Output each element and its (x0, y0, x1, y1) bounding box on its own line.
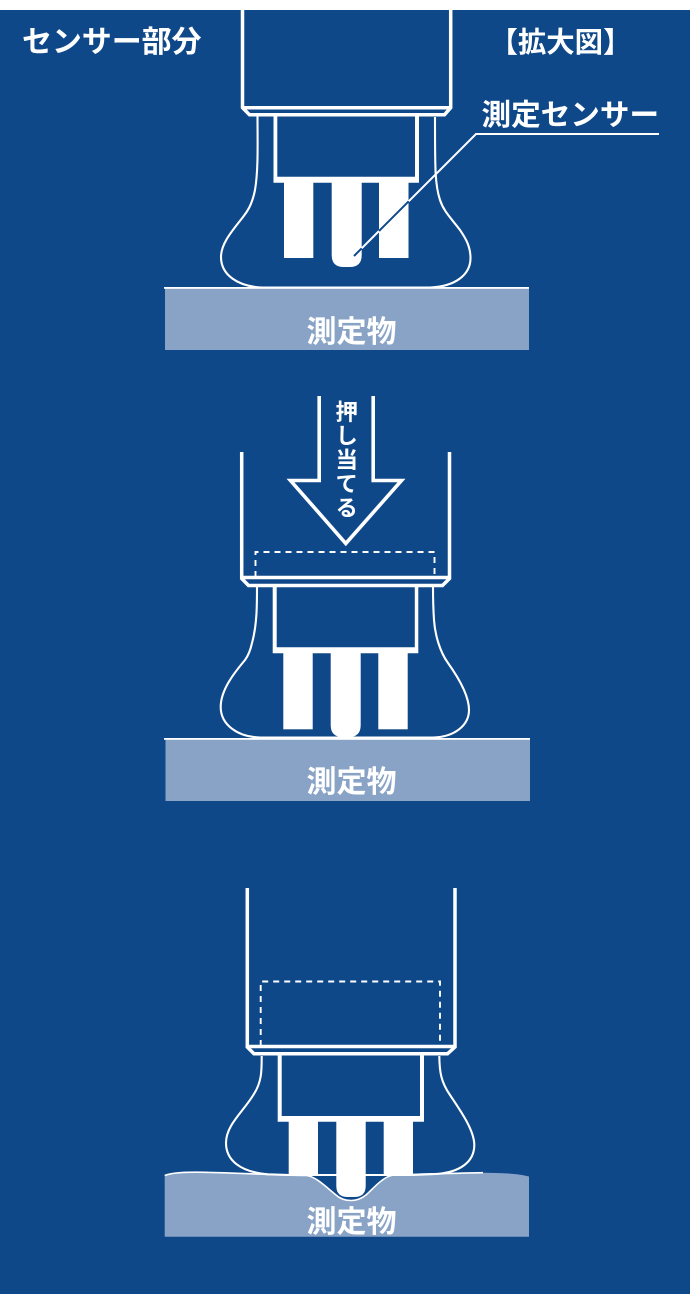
gel cover outline (221, 116, 470, 288)
sensor body (278, 1055, 424, 1122)
arrow: press down (290, 396, 402, 544)
measured object block: 測定物 (306, 316, 396, 349)
measured object block (164, 738, 530, 801)
panel: sensor pressed into object (165, 888, 529, 1239)
deformed measured object: 測定物 (306, 1206, 396, 1239)
sensor housing (247, 888, 455, 1054)
panel: pressing against object (164, 396, 530, 801)
label: measuring sensor: 測定センサー (482, 99, 659, 132)
sensor housing (242, 452, 450, 586)
heading: sensor section: センサー部分 (22, 26, 201, 59)
heading: enlarged view: 【拡大図】 (490, 27, 631, 59)
deformed measured object (165, 1172, 529, 1239)
measured object block: 測定物 (306, 766, 396, 799)
sensor body (274, 115, 419, 183)
sensor body (273, 586, 418, 653)
measuring sensor pin (332, 182, 362, 267)
gel cover outline (221, 587, 469, 738)
panel: sensor at rest (164, 10, 659, 350)
sensor housing (242, 10, 451, 115)
arrow label: press against: 押し当てる (333, 400, 358, 520)
internal dashed outline (256, 552, 434, 577)
internal dashed outline (261, 982, 440, 1046)
outer pins (284, 182, 408, 258)
outer pins (289, 1121, 413, 1174)
outer pins (283, 653, 408, 729)
measuring sensor pin (336, 1121, 366, 1197)
gel cover outline (226, 1056, 474, 1175)
measuring sensor pin (331, 653, 361, 737)
measured object block (164, 287, 529, 350)
callout line: measuring sensor (354, 134, 659, 256)
